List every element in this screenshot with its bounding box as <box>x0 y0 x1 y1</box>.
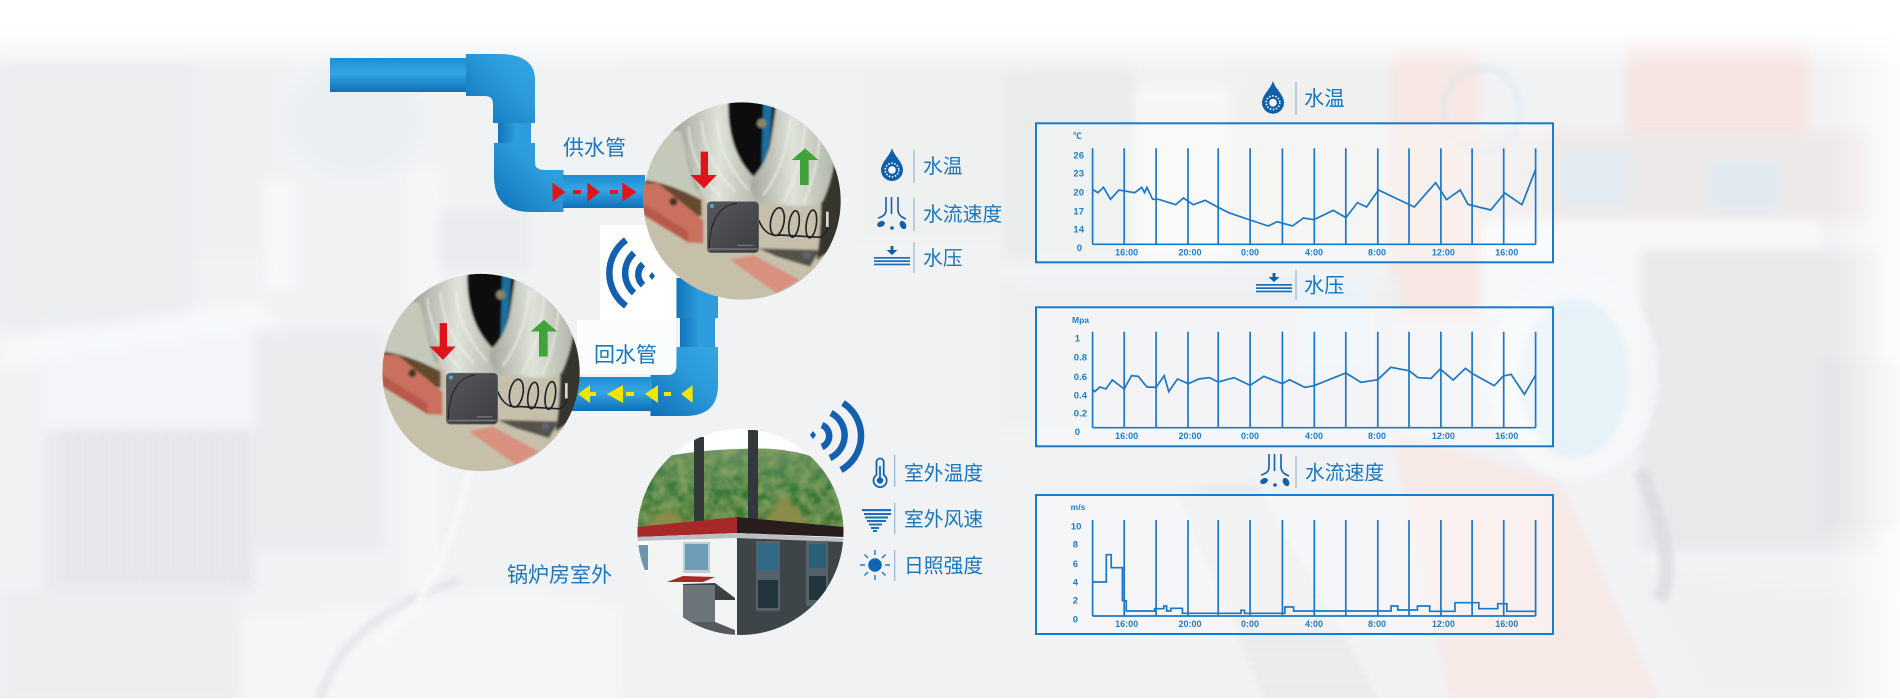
图表:水温折线图: 8:00 <box>1368 248 1386 258</box>
图表:水温折线图: 20 <box>1073 188 1084 199</box>
回水管 管道 <box>572 278 718 416</box>
标题:水流速度 <box>1259 454 1384 488</box>
图表:水温折线图: 16:00 <box>1115 248 1138 258</box>
供水管 红色流向箭头 <box>552 183 636 202</box>
图标:水压 <box>874 246 910 265</box>
图例文字:水温: 水温 <box>923 156 963 178</box>
图表:水流速度阶梯图: 16:00 <box>1115 619 1138 629</box>
图例:室外温度 室外风速 日照强度 <box>860 455 983 581</box>
回水管 标签: 回水管 <box>594 344 657 367</box>
图表:水温折线图: 14 <box>1073 224 1085 235</box>
图例文字:水压: 水压 <box>923 248 963 270</box>
供水管 管道 <box>330 54 645 212</box>
回水管 黄色流向箭头 <box>578 385 693 403</box>
图片:回水管传感器圆形照片 <box>379 272 586 475</box>
深色墙 <box>737 538 844 636</box>
白色底块:回水管标签后方 <box>577 320 676 374</box>
图表:水温折线图: 20:00 <box>1178 248 1202 258</box>
标题:水压: 水压 <box>1304 274 1345 298</box>
图表:水压折线图: Mpa <box>1072 315 1089 325</box>
图表:水温折线图: 23 <box>1073 169 1084 180</box>
图表:水压折线图: 20:00 <box>1178 431 1202 441</box>
图表:水流速度阶梯图 <box>1036 495 1553 634</box>
图例文字:室外温度: 室外温度 <box>904 463 983 485</box>
窗 <box>683 542 710 573</box>
标题:水压 <box>1256 270 1345 300</box>
图表:水压折线图: 1 <box>1075 334 1081 345</box>
图例文字:室外风速: 室外风速 <box>904 509 983 531</box>
图标:水流速度 <box>876 197 908 230</box>
图表:水温折线图 <box>1036 123 1553 262</box>
图表:水压折线图: 0.6 <box>1074 372 1087 383</box>
图表:水流速度阶梯图: 8 <box>1073 540 1078 551</box>
图片:锅炉房室外圆形图 <box>637 429 844 636</box>
图表:水温折线图: 0:00 <box>1241 248 1259 258</box>
图表:水流速度阶梯图: 12:00 <box>1432 619 1455 629</box>
图片:供水管传感器圆形照片 <box>640 100 847 303</box>
标题:水温 <box>1262 81 1345 115</box>
图表:水温折线图: 12:00 <box>1432 248 1455 258</box>
屋顶 <box>638 517 737 537</box>
图表:水温折线图: ℃ <box>1073 131 1082 141</box>
图表:水压折线图: 0 <box>1075 427 1080 438</box>
图表:水压折线图: 12:00 <box>1432 431 1455 441</box>
白墙 <box>648 538 737 636</box>
图表:水流速度阶梯图: 4:00 <box>1305 619 1323 629</box>
雨棚 <box>667 576 715 582</box>
图表:水流速度阶梯图: m/s <box>1071 502 1086 512</box>
图标:无线信号(室外) <box>810 403 861 470</box>
图表:水压折线图: 8:00 <box>1368 431 1386 441</box>
图表:水压折线图: 16:00 <box>1115 431 1138 441</box>
图表:水压折线图: 0.8 <box>1074 353 1087 364</box>
图表:水压折线图: 4:00 <box>1305 431 1323 441</box>
图例:水温 水流速度 水压 <box>874 148 1002 273</box>
图例文字:水流速度: 水流速度 <box>923 204 1002 226</box>
图表:水流速度阶梯图: 10 <box>1071 521 1081 532</box>
门 <box>683 585 715 622</box>
图表:水温折线图: 0 <box>1077 243 1082 254</box>
图表:水温折线图: 4:00 <box>1305 248 1323 258</box>
图表:水流速度阶梯图: 8:00 <box>1368 619 1386 629</box>
图表:水压折线图: 0.4 <box>1074 390 1088 401</box>
图标:无线信号(供回水之间) <box>609 240 655 306</box>
图标:风速 <box>862 509 891 532</box>
锅炉房室外 标签: 锅炉房室外 <box>507 564 612 587</box>
图表:水压折线图 <box>1036 307 1553 446</box>
图表:水温折线图: 26 <box>1073 150 1084 161</box>
图表:水流速度阶梯图: 2 <box>1073 595 1078 606</box>
图表:水流速度阶梯图: 6 <box>1073 559 1078 570</box>
图表:水流速度阶梯图: 16:00 <box>1495 619 1518 629</box>
烟囱 <box>694 437 704 522</box>
图表:水温折线图: 16:00 <box>1495 248 1518 258</box>
标题:水流速度: 水流速度 <box>1305 462 1384 484</box>
图表:水流速度阶梯图: 20:00 <box>1178 619 1202 629</box>
标题:水温: 水温 <box>1304 88 1345 110</box>
图标:温度计 <box>874 458 887 487</box>
图表:水压折线图: 0.2 <box>1074 409 1087 420</box>
图表:水流速度阶梯图: 0 <box>1073 614 1078 625</box>
图例文字:日照强度: 日照强度 <box>904 556 983 578</box>
图表:水压折线图: 16:00 <box>1495 431 1518 441</box>
供水管 标签: 供水管 <box>563 137 626 160</box>
图表:水流速度阶梯图: 4 <box>1073 577 1079 588</box>
图标:太阳 <box>860 550 890 580</box>
白色底块:无线信号后方 <box>600 225 676 320</box>
图标:水温 <box>881 148 903 181</box>
图表:水温折线图: 17 <box>1073 206 1084 217</box>
图表:水流速度阶梯图: 0:00 <box>1241 619 1259 629</box>
图表:水压折线图: 0:00 <box>1241 431 1259 441</box>
